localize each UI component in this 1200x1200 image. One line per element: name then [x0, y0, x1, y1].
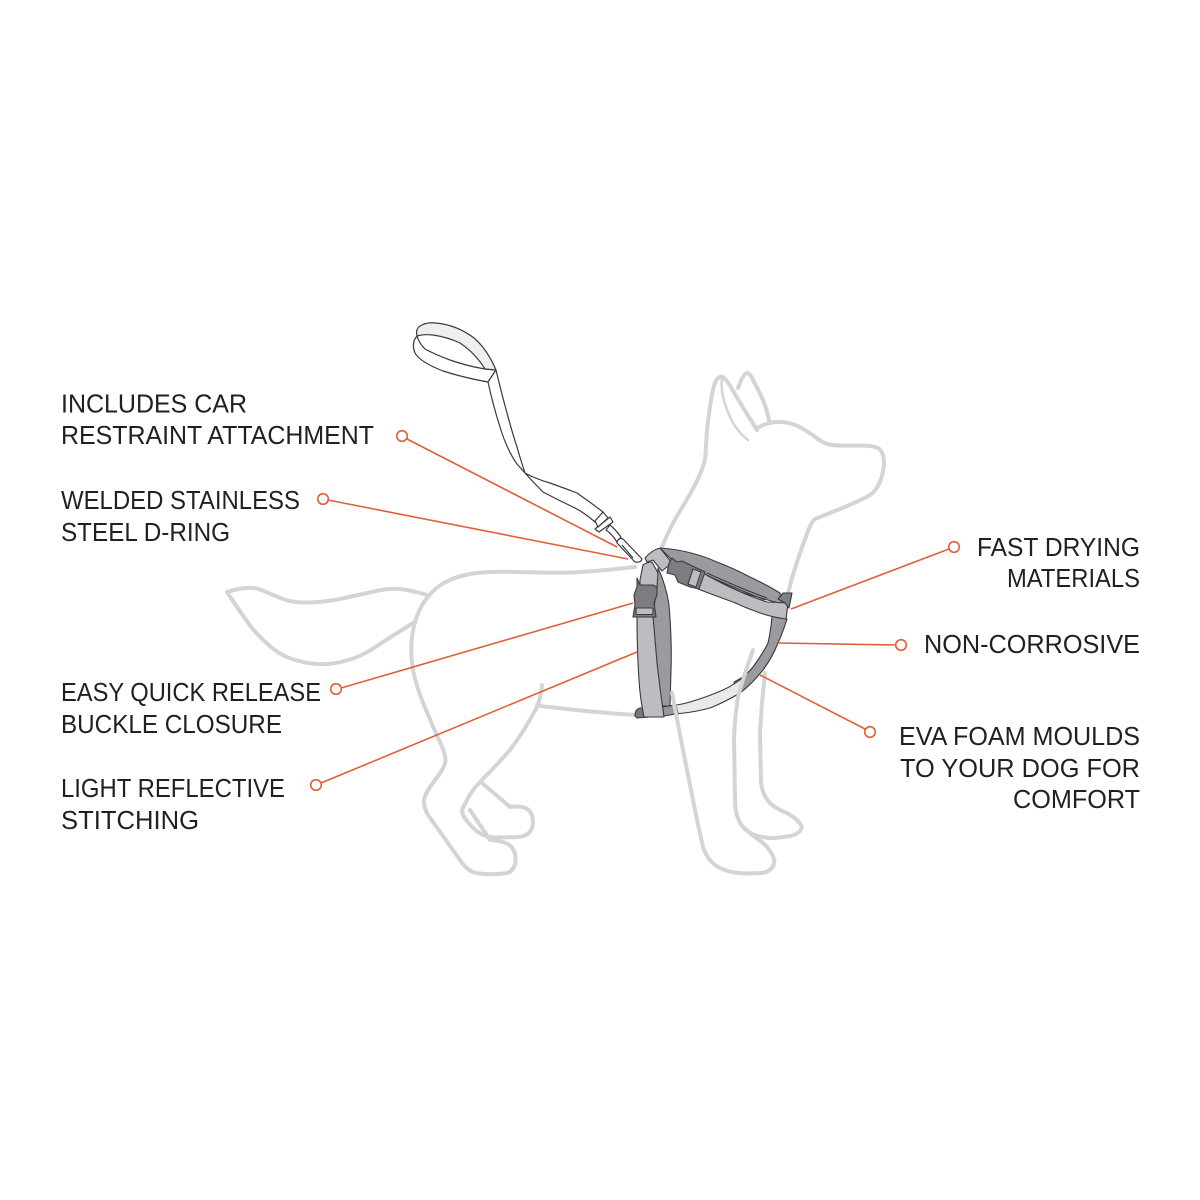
dog tail — [227, 588, 427, 664]
label text: WELDED STAINLESS — [61, 485, 300, 515]
callout: fast drying — [791, 532, 1140, 609]
label text — [977, 532, 1140, 593]
harness: shoulder connector — [645, 548, 672, 571]
label text: COMFORT — [1013, 784, 1140, 814]
leader line — [331, 603, 633, 694]
callout: d-ring — [61, 485, 628, 559]
leader line — [318, 494, 628, 559]
label text: MATERIALS — [1007, 563, 1140, 593]
label text: INCLUDES CAR — [61, 388, 247, 418]
label text — [61, 485, 300, 547]
harness: chest strap dark panel — [653, 568, 671, 706]
leash — [413, 323, 642, 562]
leader line — [311, 652, 637, 790]
callout: car restraint attachment — [61, 388, 617, 547]
callout: reflective stitching — [61, 652, 637, 835]
harness: vertical quick release buckle — [633, 578, 657, 617]
harness: belly band tab — [662, 705, 678, 716]
label text: RESTRAINT ATTACHMENT — [61, 420, 374, 450]
leader line — [791, 542, 959, 609]
harness: upper chest strap — [640, 562, 658, 587]
harness — [633, 548, 792, 718]
label text — [61, 677, 321, 739]
harness: stitching line — [707, 573, 767, 600]
label text: EVA FOAM MOULDS — [899, 721, 1140, 751]
dog back and hind leg — [411, 567, 635, 874]
label text — [899, 721, 1140, 814]
harness: side end tab — [778, 593, 792, 608]
near front leg — [672, 650, 774, 874]
label text: STITCHING — [61, 805, 199, 835]
label text: NON-CORROSIVE — [924, 629, 1140, 659]
harness: light neck strap — [698, 573, 788, 619]
callout: quick release buckle — [61, 603, 633, 739]
leash clip — [595, 512, 642, 562]
dog outline — [227, 373, 884, 874]
label text: TO YOUR DOG FOR — [900, 753, 1140, 783]
dog head and neck — [662, 373, 884, 593]
callout: eva foam — [760, 675, 1140, 814]
leader line — [760, 675, 875, 737]
label text: BUCKLE CLOSURE — [61, 709, 282, 739]
harness: rib strap dark band — [734, 616, 787, 693]
callout: non-corrosive — [778, 629, 1140, 659]
label text: LIGHT REFLECTIVE — [61, 773, 285, 803]
label text — [61, 388, 374, 450]
leash handle loop — [413, 323, 496, 382]
leader line — [397, 431, 617, 547]
harness: foot tab — [635, 708, 650, 718]
label text: STEEL D-RING — [61, 517, 230, 547]
harness: front vertical strap — [637, 616, 664, 717]
label text: EASY QUICK RELEASE — [61, 677, 321, 707]
far front leg — [740, 673, 802, 838]
harness: neck dark panel — [660, 548, 782, 604]
label text: FAST DRYING — [977, 532, 1140, 562]
leash strap — [488, 370, 603, 522]
leader line — [778, 640, 906, 650]
harness: lower pale belly band — [668, 675, 746, 715]
label text — [61, 773, 285, 835]
dog front legs — [672, 650, 802, 874]
harness: neck quick release buckle — [667, 558, 705, 589]
